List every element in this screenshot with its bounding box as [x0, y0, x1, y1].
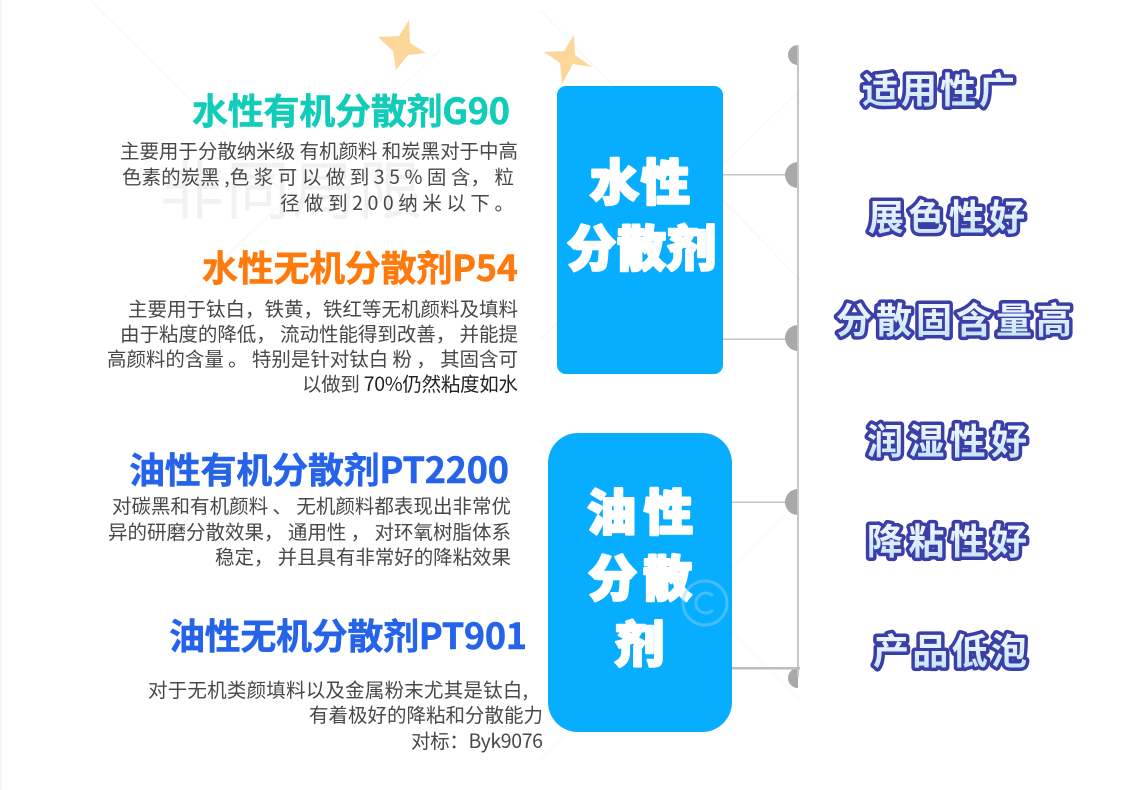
- panel: water-based dispersant box: 水性: [590, 144, 690, 215]
- text block: PT901 description: 对于无机类颜填料以及金属粉末尤其是钛白,: [148, 674, 528, 703]
- label: high dispersion solids: 分散固含量高: [836, 292, 1072, 344]
- text block: PT2200 description: [108, 490, 511, 570]
- icon: star left: [378, 20, 426, 70]
- text block: P54 description: [107, 293, 518, 397]
- text block: G90 description: 色素的炭黑 ,色 浆 可 以 做 到 3 5 % 固 含， 粒: [122, 161, 514, 190]
- text block: PT901 description: 有着极好的降粘和分散能力: [309, 699, 543, 728]
- text block: PT2200 description: 稳定， 并且具有非常好的降粘效果: [215, 541, 511, 570]
- text block: PT2200 description: 对碳黑和有机颜料 、 无机颜料都表现出非常优: [112, 490, 511, 519]
- panel: water-based dispersant box: 分散剂: [567, 210, 716, 281]
- heading: P54: 水性无机分散剂P54: [202, 240, 518, 292]
- text block: G90 description: [120, 135, 518, 216]
- text block: PT901 description: [148, 674, 543, 754]
- text block: P54 description: 由于粘度的降低， 流动性能得到改善， 并能提: [120, 318, 518, 347]
- panel: oil-based descriptions: [108, 442, 543, 754]
- icon: star right: [544, 35, 592, 84]
- heading: PT2200: 油性有机分散剂PT2200: [129, 442, 509, 494]
- watermark: copyright mark: [683, 581, 727, 625]
- panel: water-based dispersant box: [557, 86, 723, 374]
- heading: PT901: 油性无机分散剂PT901: [169, 608, 527, 660]
- text block: P54 description: 高颜料的含量 。 特别是针对钛白 粉 ， 其固含可: [107, 343, 518, 372]
- text block: P54 description: 主要用于钛白，铁黄，铁红等无机颜料及填料: [128, 293, 518, 322]
- label: low foam: 产品低泡: [873, 623, 1027, 675]
- watermark: faint background text: 非同局限: [160, 141, 422, 233]
- label: good viscosity reduction: 降粘性好: [867, 513, 1027, 565]
- panel: oil-based dispersant box: 油性: [587, 474, 693, 545]
- connector: timeline spine with nodes: [723, 45, 800, 688]
- text block: PT901 description: 对标：Byk9076: [411, 725, 543, 754]
- panel: oil-based dispersant box: [548, 433, 732, 732]
- heading: G90: 水性有机分散剂G90: [192, 83, 510, 135]
- label: wide applicability: 适用性广: [862, 62, 1015, 114]
- text block: G90 description: 径 做 到 2 0 0 纳 米 以 下 。: [280, 187, 514, 216]
- panel: oil-based dispersant box: 剂: [615, 606, 664, 677]
- text block: PT2200 description: 异的研磨分散效果， 通用性 ， 对环氧树脂体系: [108, 516, 511, 545]
- label: good wetting: 润湿性好: [867, 413, 1027, 465]
- panel: oil-based dispersant box: 分散: [588, 540, 692, 611]
- list: product feature labels: [836, 62, 1072, 675]
- panel: water-based descriptions: [107, 83, 518, 397]
- label: good color development: 展色性好: [868, 189, 1025, 241]
- text block: G90 description: 主要用于分散纳米级 有机颜料 和炭黑对于中高: [120, 135, 518, 164]
- text block: P54 description: 以做到 70%仍然粘度如水: [302, 368, 518, 397]
